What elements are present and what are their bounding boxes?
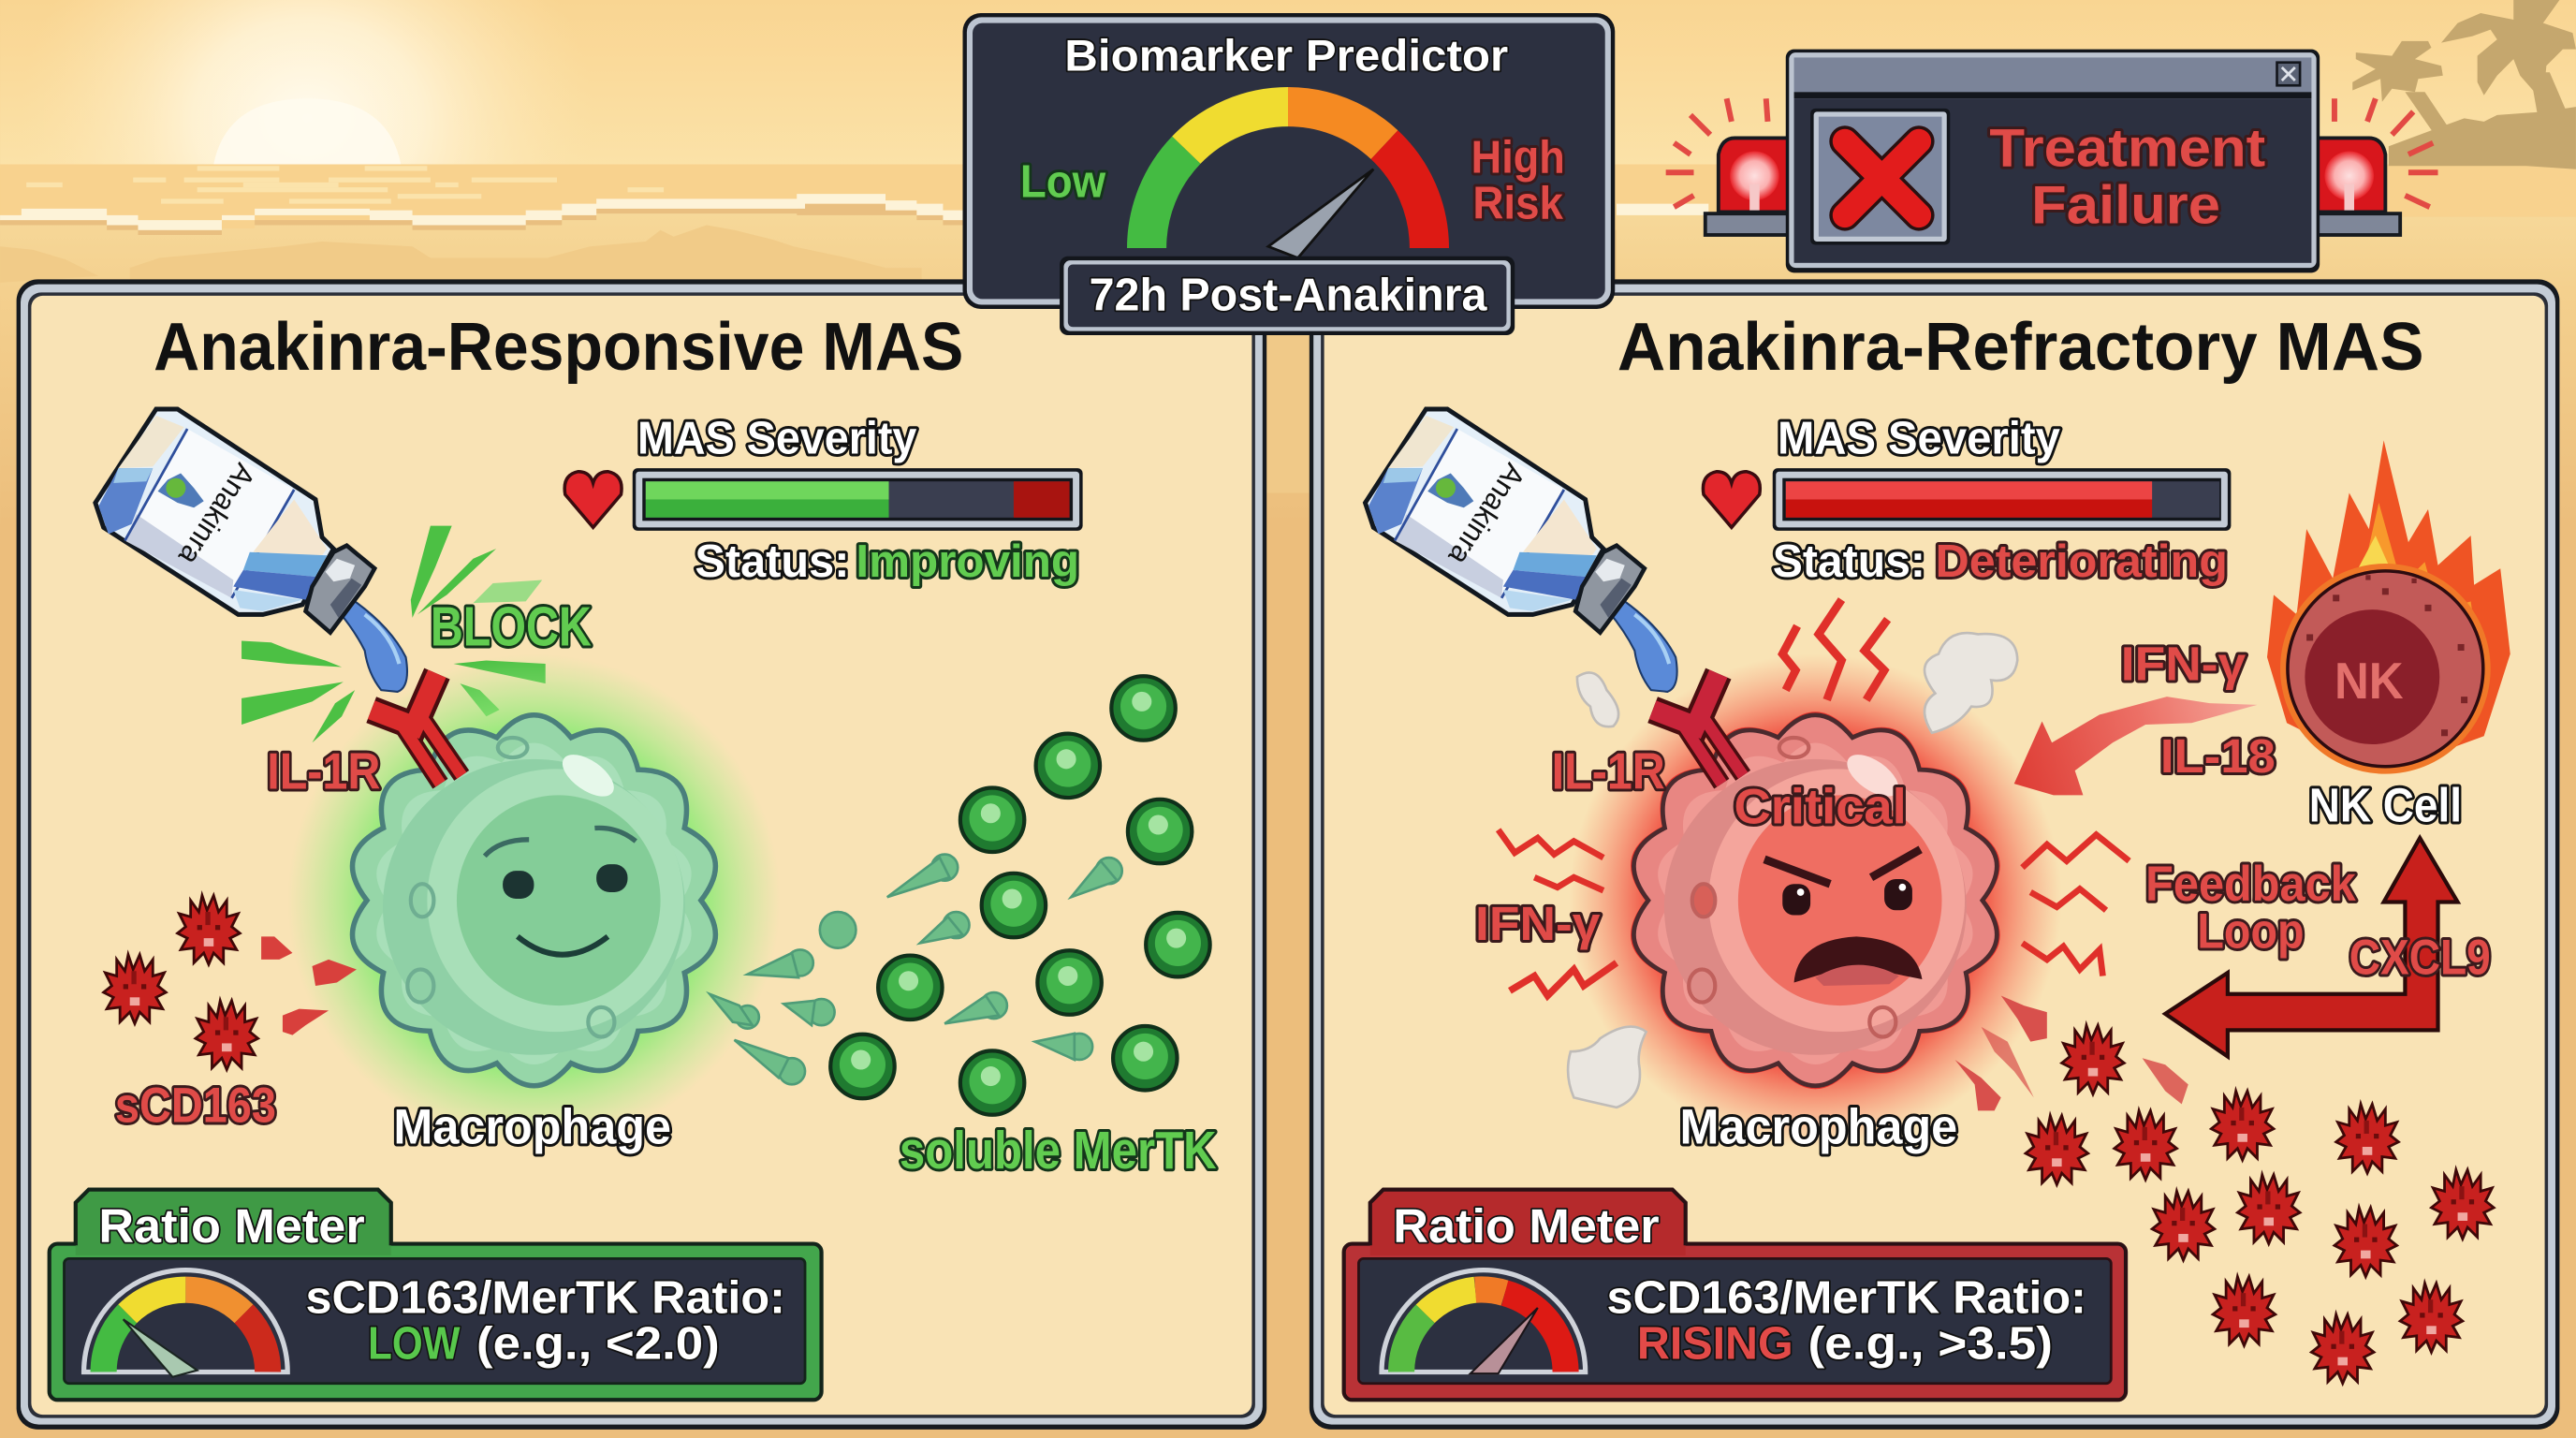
label: High Risk: Risk [1472, 178, 1564, 228]
soluble MerTK particles [710, 676, 1210, 1115]
severity bar left [633, 468, 1083, 531]
macrophage left glow [287, 654, 781, 1147]
status left [695, 536, 1079, 587]
sea highlights [26, 166, 664, 204]
failure text: Treatment [1989, 118, 2265, 178]
icon: heart left [564, 472, 622, 527]
highlight [555, 746, 621, 804]
label: IFN-gamma top: IFN-γ [2121, 638, 2247, 691]
highlight [1840, 746, 1906, 804]
severity label right: MAS Severity [1778, 413, 2061, 463]
angry face [1764, 849, 1922, 986]
macrophage right [1631, 712, 2000, 1089]
receptor IL-1R left [372, 674, 461, 784]
label: BLOCK: BLOCK [431, 595, 592, 658]
distant island and palm trees [2352, 0, 2576, 169]
gauge arc [1147, 107, 1429, 248]
sand dunes [130, 225, 922, 283]
ratio text: RISING [1637, 1318, 1793, 1369]
label: High Risk [1471, 132, 1565, 228]
status left: Status: [695, 536, 849, 587]
receptor IL-1R right [1653, 674, 1743, 784]
arrow: CXCL9 feedback loop [2165, 838, 2458, 1056]
failure text [1989, 118, 2265, 236]
drug stream right [1608, 601, 1677, 692]
nucleus [2305, 609, 2439, 744]
macrophage left [352, 715, 715, 1086]
tab [1370, 1190, 1686, 1255]
status right [1773, 536, 2228, 587]
heading: Anakinra-Responsive MAS: Anakinra-Responsive MAS [154, 310, 963, 385]
released comets [710, 855, 1122, 1084]
nucleus [1738, 795, 1942, 1005]
IFN-gamma shock waves [1499, 829, 2130, 996]
ratio text [305, 1272, 785, 1369]
label: soluble MerTK: soluble MerTK [900, 1121, 1217, 1180]
gauge needle [1268, 169, 1373, 258]
sCD163 molecules right [2026, 1025, 2494, 1384]
heat squiggles [1782, 600, 1888, 700]
tab: Ratio Meter [1393, 1199, 1660, 1253]
macrophage right glow [1569, 654, 2062, 1147]
timepoint pill: 72h Post-Anakinra [1060, 257, 1515, 335]
status right: Deteriorating [1935, 536, 2228, 587]
label: High Risk: High [1471, 132, 1565, 183]
meter body [50, 1244, 822, 1400]
icon: Anakinra bottle left [95, 409, 374, 633]
organelles [1689, 738, 1895, 1036]
fragments [261, 936, 357, 1035]
ratio meter right [1344, 1190, 2126, 1400]
foam wave [0, 194, 1708, 230]
siren: right [2308, 138, 2400, 235]
organelles [407, 738, 614, 1036]
ratio text: (e.g., >3.5) [1808, 1318, 2053, 1369]
ratio text: sCD163/MerTK Ratio: [1606, 1272, 2086, 1323]
NK cell [2284, 566, 2487, 770]
sCD163 molecules left [104, 895, 357, 1070]
mini gauge [1382, 1270, 1586, 1373]
label: IL-1R right: IL-1R [1552, 742, 1665, 800]
close button [2277, 63, 2300, 85]
siren light rays [1666, 98, 2438, 207]
icon: heart right [1703, 472, 1760, 527]
panel: Biomarker Predictor [963, 13, 1615, 309]
label: IL-1R left: IL-1R [267, 742, 380, 800]
sun glow [20, 0, 594, 365]
label: CXCL9: CXCL9 [2349, 931, 2491, 986]
status right: Status: [1773, 536, 1925, 587]
panel: Treatment Failure alert [1786, 50, 2320, 272]
label: Feedback Loop: Feedback [2145, 857, 2356, 912]
arrow: NK cell to macrophage [2014, 697, 2257, 795]
speckles [2306, 575, 2467, 736]
ratio meter left [50, 1190, 822, 1400]
NK text: NK [2334, 653, 2404, 710]
label: Feedback Loop [2145, 857, 2356, 960]
sea [0, 165, 2576, 230]
ratio text: sCD163/MerTK Ratio: [305, 1272, 785, 1323]
cytokine fragments right [1955, 996, 2188, 1110]
severity label left: MAS Severity [637, 413, 917, 463]
label: Low: Low [1020, 157, 1106, 208]
status left: Improving [856, 536, 1079, 587]
ratio text: LOW [368, 1318, 461, 1369]
ratio text [1606, 1272, 2086, 1369]
label: Feedback Loop: Loop [2197, 904, 2304, 960]
meter screen [1358, 1258, 2111, 1384]
panel: Anakinra-Responsive MAS [17, 279, 1266, 1430]
tab [76, 1190, 391, 1255]
panel: Anakinra-Refractory MAS [1310, 279, 2559, 1430]
meter screen [65, 1258, 805, 1384]
drug stream left [339, 601, 407, 692]
siren: left [1705, 138, 1797, 235]
label: Macrophage left: Macrophage [393, 1099, 671, 1154]
tab: Ratio Meter [98, 1199, 365, 1253]
NK cell flames [2267, 440, 2510, 772]
label: Critical: Critical [1734, 779, 1907, 834]
severity bar right [1773, 468, 2231, 531]
sun [213, 98, 401, 165]
meter body [1344, 1244, 2126, 1400]
timepoint pill: 72h Post-Anakinra: 72h Post-Anakinra [1090, 271, 1487, 321]
label: sCD163: sCD163 [115, 1078, 276, 1134]
happy face [485, 828, 636, 955]
icon: Anakinra bottle right [1365, 409, 1645, 633]
ratio text: (e.g., <2.0) [476, 1318, 720, 1369]
predictor heading: Biomarker Predictor [1064, 31, 1508, 81]
label: Macrophage right: Macrophage [1680, 1099, 1957, 1154]
steam puffs [1568, 633, 2017, 1108]
nucleus [457, 795, 661, 1005]
failure text: Failure [2031, 176, 2220, 236]
foam shadow [0, 204, 964, 235]
failure X icon [1810, 109, 1950, 244]
block burst rays [242, 526, 546, 742]
heading: Anakinra-Refractory MAS: Anakinra-Refractory MAS [1617, 310, 2424, 385]
label: IL-18: IL-18 [2160, 729, 2276, 783]
label: NK Cell: NK Cell [2309, 779, 2462, 832]
label: IFN-gamma left: IFN-γ [1475, 897, 1601, 950]
mini gauge [84, 1270, 287, 1377]
